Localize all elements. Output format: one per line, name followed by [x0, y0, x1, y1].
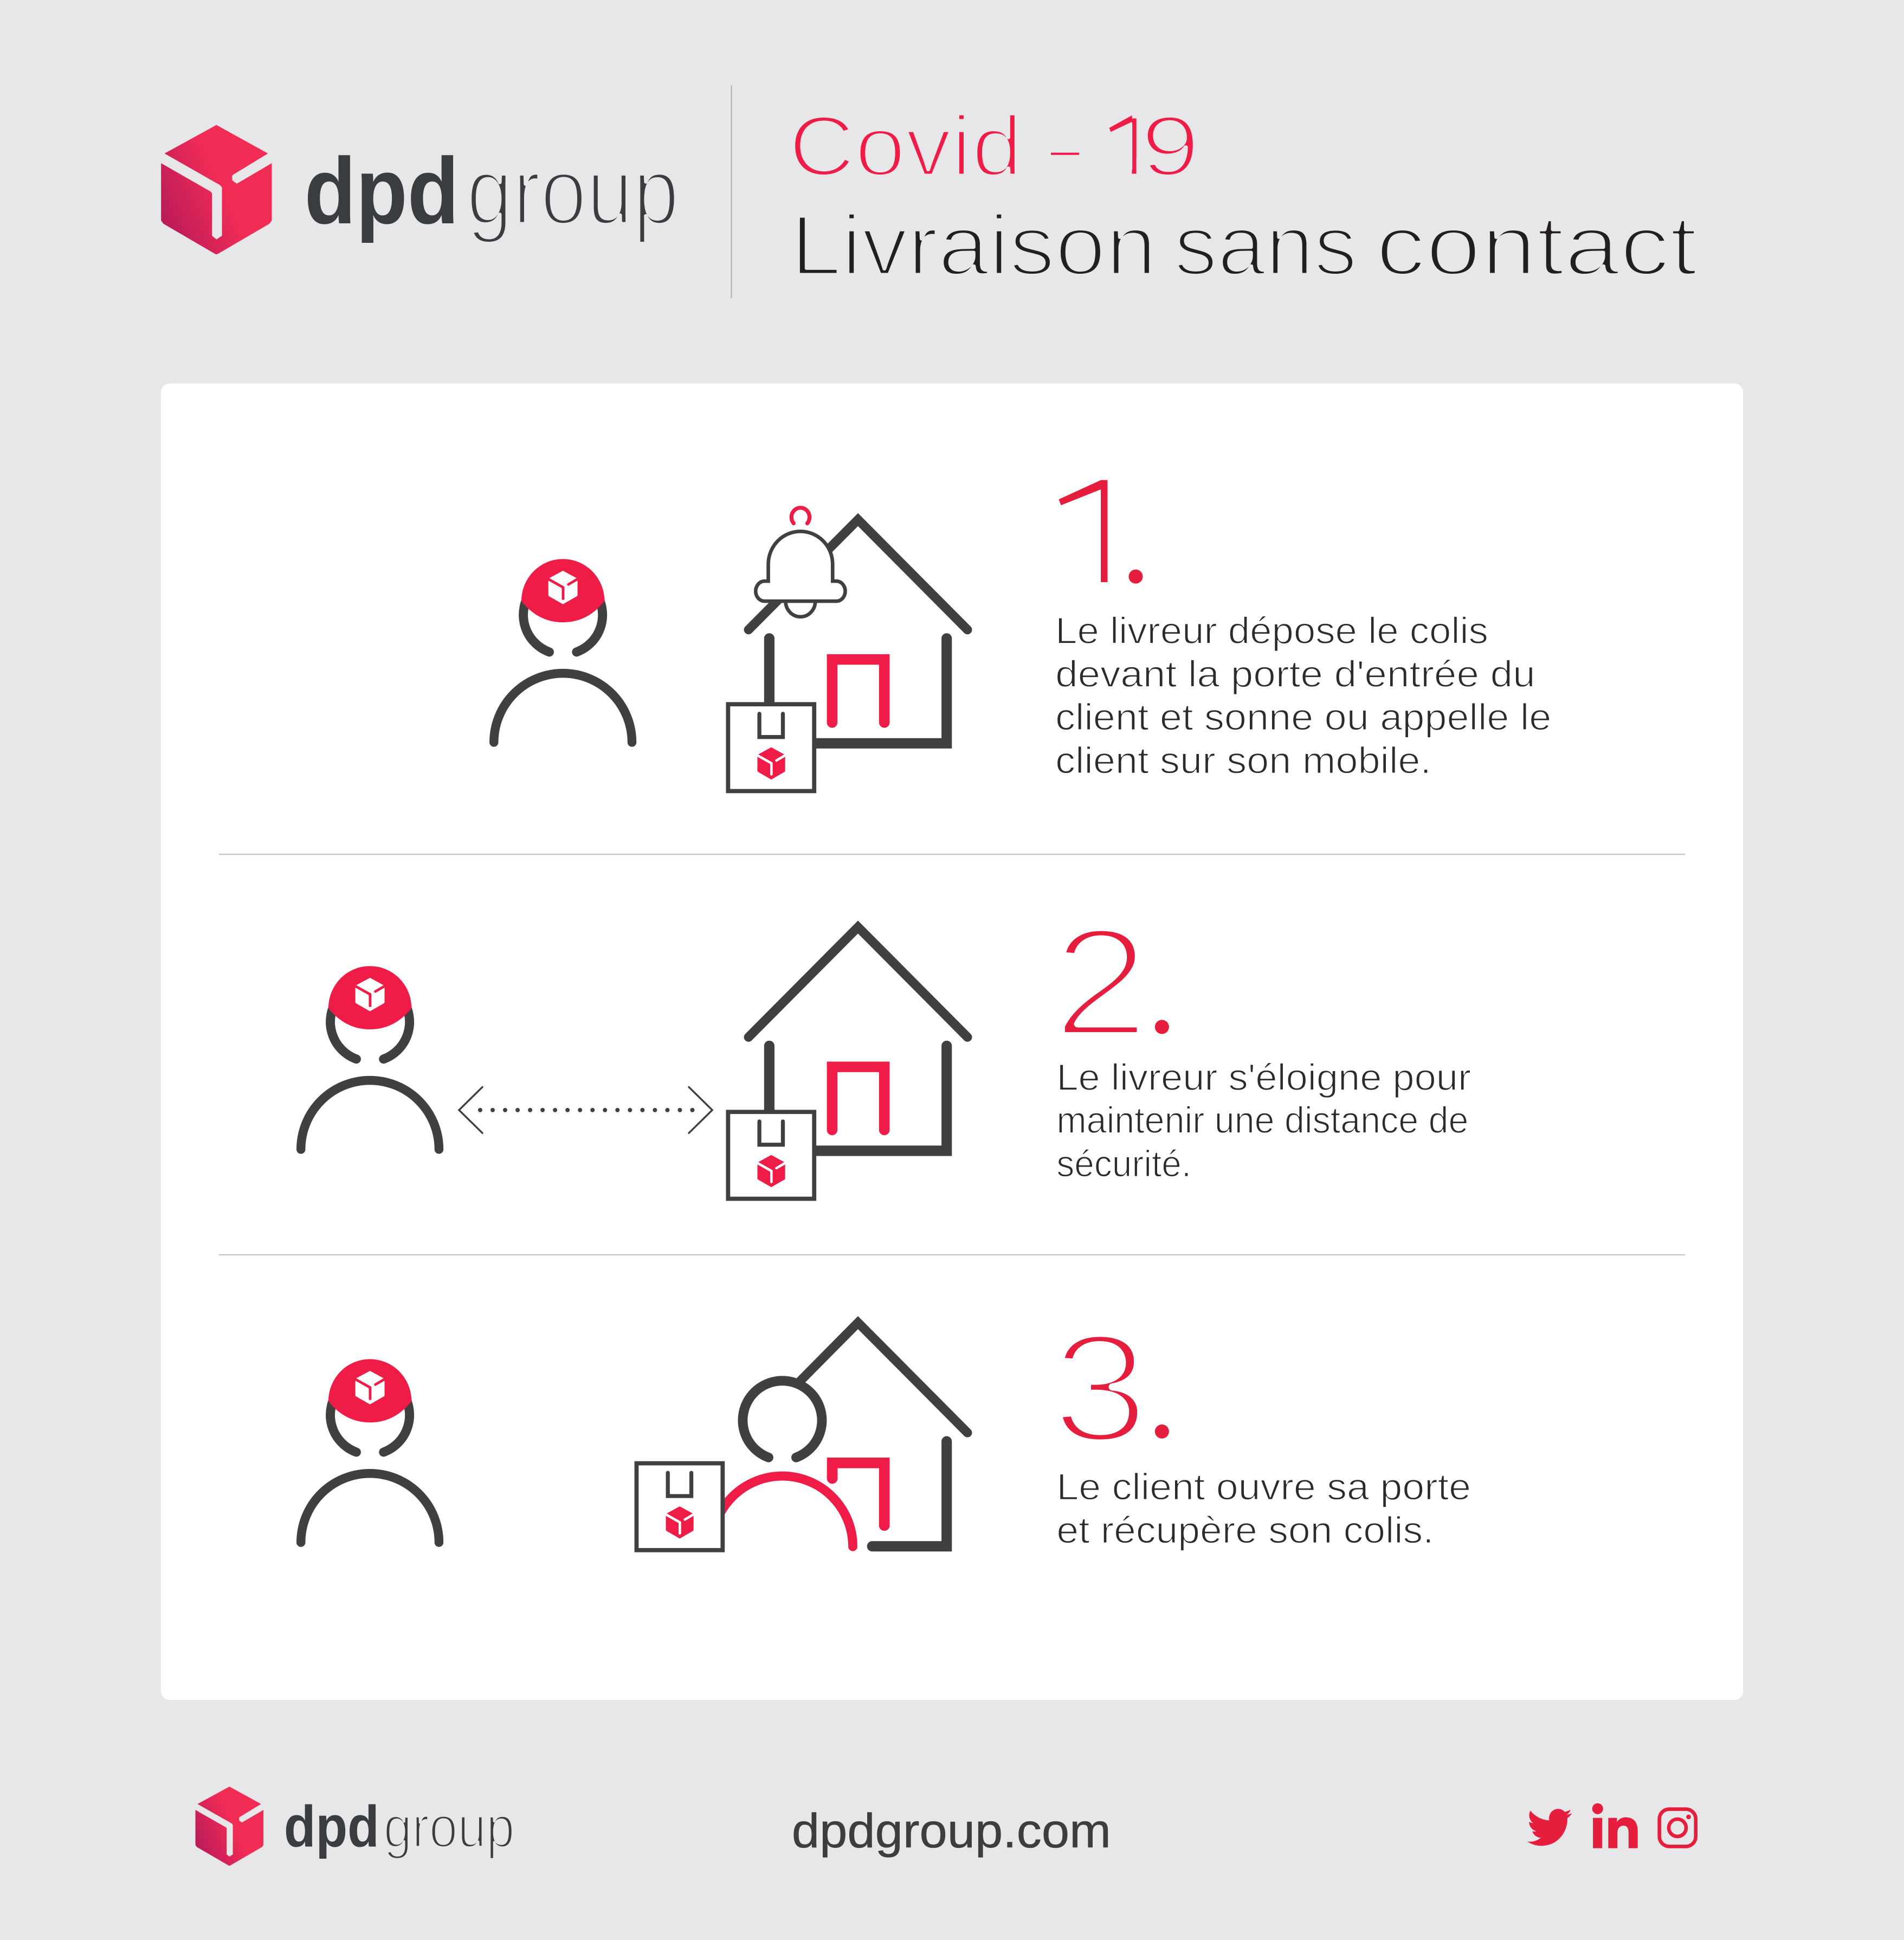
- arrow: safety distance: [459, 1087, 712, 1133]
- step 1 text: client sur son mobile.: [1055, 740, 1431, 782]
- step number 2: .: [1141, 896, 1184, 1068]
- title: [789, 99, 1698, 293]
- icon: customer: [712, 1381, 853, 1546]
- icon: dpd cube logo: [196, 1787, 263, 1866]
- title line 2: contact: [1376, 198, 1698, 293]
- title line 2: sans: [1174, 198, 1357, 293]
- icon: twitter: [1527, 1809, 1572, 1846]
- title line 2: [791, 198, 1698, 293]
- step 1 text: client et sonne ou appelle le: [1055, 697, 1551, 738]
- step number 3: [1051, 1300, 1184, 1474]
- icon: house: [748, 520, 967, 743]
- title line 1: Covid: [789, 99, 1023, 194]
- step 3 text: [1056, 1466, 1471, 1551]
- step 2 text: Le livreur s'éloigne pour: [1056, 1056, 1471, 1098]
- step number 1: 1: [1059, 446, 1144, 618]
- logo wordmark: dpd: [305, 138, 459, 243]
- title line 1: 1: [1109, 99, 1157, 194]
- step number 3: 3: [1051, 1302, 1149, 1474]
- step number 2: 2: [1052, 896, 1150, 1068]
- step number 1: .: [1114, 446, 1157, 618]
- step 3 text: et récupère son colis.: [1056, 1509, 1434, 1551]
- title line 1: [789, 99, 1200, 194]
- icon: parcel at door: [728, 1112, 814, 1199]
- icon: house with open door: [800, 1323, 967, 1546]
- step 3: [301, 1300, 1471, 1551]
- icon: delivery person: [301, 966, 439, 1149]
- header logo: dpdgroup: [161, 125, 679, 254]
- header vertical divider: [731, 85, 732, 298]
- step 2 text: sécurité.: [1056, 1143, 1191, 1185]
- icon: delivery person: [494, 559, 632, 743]
- title line 1: 9: [1141, 99, 1200, 194]
- panel: steps card: [161, 384, 1743, 1700]
- icon: house: [748, 927, 967, 1151]
- step 2 text: [1056, 1056, 1471, 1185]
- logo wordmark: dpd: [284, 1794, 379, 1859]
- icon: doorbell: [756, 508, 845, 617]
- logo wordmark: [284, 1794, 515, 1859]
- icon: instagram: [1660, 1809, 1696, 1846]
- step 2 text: maintenir une distance de: [1056, 1099, 1468, 1141]
- step 1 text: Le livreur dépose le colis: [1055, 610, 1488, 652]
- website address: dpdgroup.com: [792, 1803, 1111, 1858]
- step 1: [494, 446, 1551, 791]
- step number 2: [1052, 896, 1184, 1068]
- icon: delivery person: [301, 1359, 439, 1543]
- step 1 text: [1055, 610, 1551, 782]
- footer logo: dpdgroup: [196, 1787, 515, 1866]
- title line 1: –: [1050, 99, 1080, 194]
- icon: parcel: [636, 1464, 722, 1550]
- title line 2: Livraison: [791, 198, 1157, 293]
- icon: linkedin: [1592, 1803, 1638, 1848]
- step 1 text: devant la porte d'entrée du: [1055, 653, 1535, 695]
- icon: dpd cube logo: [161, 125, 272, 254]
- step 3 text: Le client ouvre sa porte: [1056, 1466, 1471, 1507]
- logo wordmark: [305, 138, 679, 244]
- social icons: [1527, 1803, 1696, 1848]
- step number 3: .: [1141, 1300, 1184, 1473]
- logo wordmark: group: [384, 1794, 515, 1859]
- logo wordmark: group: [467, 138, 679, 244]
- step 2: [301, 896, 1471, 1199]
- icon: parcel at door: [728, 704, 814, 791]
